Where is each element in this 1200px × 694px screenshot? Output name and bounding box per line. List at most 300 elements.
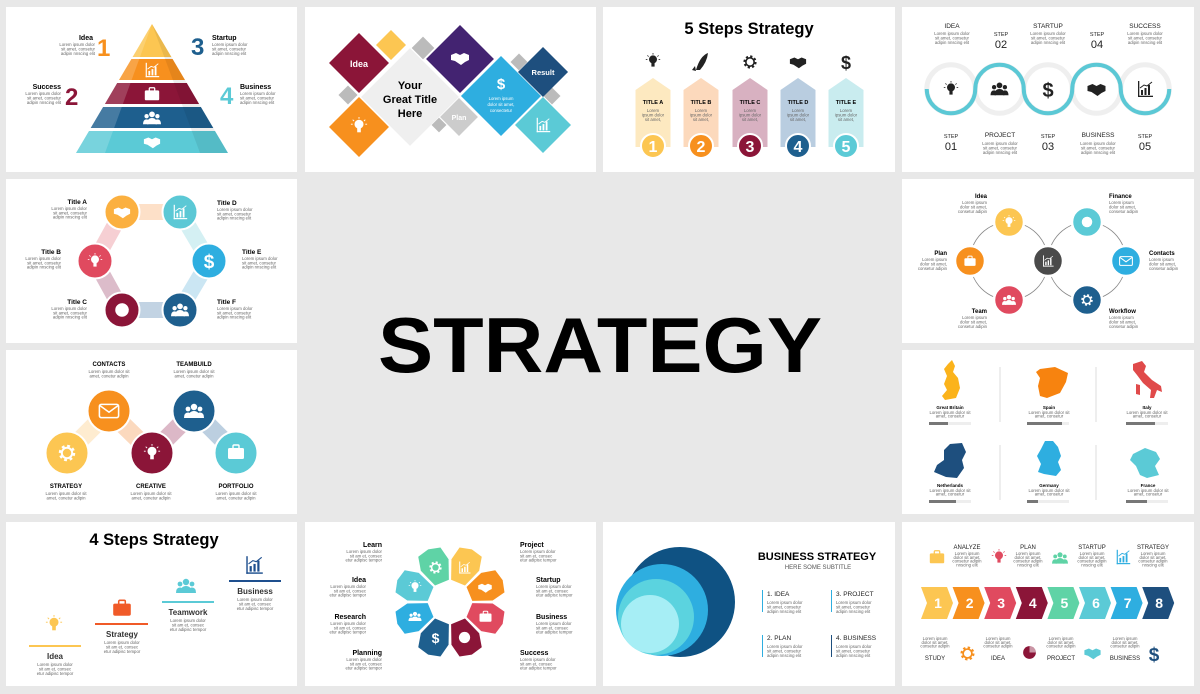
title: STRATEGY: STRATEGY <box>378 301 822 389</box>
step C <box>732 57 768 158</box>
top icons and labels: nnscing elit <box>1017 562 1040 567</box>
circle labels: Lorem ipsum <box>962 200 987 205</box>
step D: TITLE D <box>788 100 808 106</box>
numbered arrows: 2 <box>966 595 974 611</box>
top labels: 02 <box>995 39 1007 51</box>
petal labels: sit am et, consec <box>536 588 569 593</box>
step B: TITLE B <box>691 100 711 106</box>
step D: Lorem <box>792 108 805 113</box>
label: Startup 3: sit amet, consetur <box>212 46 246 52</box>
top labels: 04 <box>1091 39 1103 51</box>
top icons and labels: Lorem ipsum <box>1080 551 1105 556</box>
bottom labels: PROJECT <box>985 132 1015 139</box>
ring labels: Title A <box>67 199 87 206</box>
circle labels: dolor sit amet, <box>920 262 947 266</box>
petal labels: Lorem ipsum dolor <box>520 549 556 554</box>
map: Great Britain: Lorem ipsum dolor sit <box>929 410 971 415</box>
items: adipin nnscing elit <box>836 653 871 658</box>
zigzag icons <box>60 404 244 460</box>
step: Idea: etur adipisc tempor <box>37 671 74 676</box>
diamond: title <box>361 48 459 146</box>
zigzag labels: Lorem ipsum dolor sit <box>88 369 130 374</box>
map: Great Britain: amet, consetur <box>936 414 965 418</box>
bottom icons and labels: Lorem ipsum <box>986 636 1011 641</box>
bottom icons and labels: consetur adipin <box>1046 644 1076 649</box>
circle labels: consetur adipin <box>958 209 988 214</box>
step E: 5 <box>842 139 851 156</box>
top labels: Lorem ipsum dolor <box>1127 31 1163 36</box>
step: Business: Business <box>237 587 273 596</box>
petal labels: Success <box>520 650 549 657</box>
circle labels: Workflow <box>1109 309 1136 315</box>
map: Netherlands <box>929 443 971 503</box>
petal labels: etur adipisc tempor <box>536 593 573 598</box>
step: Strategy: etur adipisc tempor <box>104 649 141 654</box>
top labels: adipin nnscing elit <box>1031 40 1066 45</box>
step E: TITLE E <box>836 100 857 106</box>
bottom icons and labels: $ <box>1149 645 1160 666</box>
step E <box>828 53 864 158</box>
ring labels: adipin nnscing elit <box>217 315 252 320</box>
numbered arrows: 8 <box>1155 595 1163 611</box>
diamond: title: Great Title <box>383 94 437 106</box>
heading <box>758 551 877 571</box>
step: Idea: Idea <box>47 652 64 661</box>
petal labels: Planning <box>352 650 382 657</box>
step: Teamwork: etur adipisc tempor <box>170 627 207 632</box>
petal labels: sit am et, consec <box>334 625 367 630</box>
panel: 8 arrows <box>902 522 1194 686</box>
map: Spain <box>1027 367 1070 425</box>
bottom icons and labels: IDEA <box>991 656 1005 662</box>
top labels: adipin nnscing elit <box>1128 40 1163 45</box>
numbered arrows: 4 <box>1029 595 1037 611</box>
circle labels: Team <box>972 309 987 315</box>
diamond: result <box>518 47 568 97</box>
items: 4. BUSINESS <box>836 635 877 642</box>
top icons and labels: consetur adipin <box>1077 559 1107 564</box>
ring labels: sit amet, consetur <box>217 211 251 216</box>
step D <box>780 58 816 158</box>
label: Success 2: 2 <box>65 84 78 111</box>
ring labels: Title D <box>217 200 237 207</box>
small gray diamonds <box>338 37 560 132</box>
circle labels: dolor sit amet, <box>960 204 987 210</box>
zigzag labels: Lorem ipsum dolor sit <box>45 491 87 496</box>
top icons and labels: dolor sit amet, <box>954 555 980 560</box>
bottom labels: adipin nnscing elit <box>1081 150 1116 155</box>
ring labels: Title F <box>217 299 236 306</box>
step: Strategy: Lorem ipsum dolor <box>104 640 140 645</box>
step A: ipsum dolor <box>642 113 665 118</box>
title: 4 Steps Strategy <box>89 531 219 549</box>
petal labels: sit am et, consec <box>334 588 367 593</box>
wave icons <box>944 80 1153 102</box>
bottom icons and labels: dolor sit amet, <box>984 640 1012 645</box>
diamond: dollar: $ <box>497 76 506 93</box>
bottom labels: Lorem ipsum dolor <box>982 141 1018 146</box>
map: Netherlands: amet, consetur <box>936 492 965 496</box>
ring labels: Lorem ipsum dolor <box>242 256 278 261</box>
map: Great Britain: Great Britain <box>936 405 964 410</box>
petal ring <box>392 544 508 660</box>
step A <box>636 53 670 158</box>
circle labels: Plan <box>934 251 947 257</box>
map: Spain: Spain <box>1043 405 1055 410</box>
top icons and labels: dolor sit amet, <box>1140 555 1166 560</box>
petal labels: Business <box>536 614 567 621</box>
circle labels: dolor sit amet, <box>1149 262 1176 266</box>
top labels: SUCCESS <box>1129 23 1161 30</box>
items: 1. IDEA <box>767 591 790 598</box>
diamond: handshake <box>426 25 494 93</box>
petal labels: Lorem ipsum dolor <box>330 584 367 589</box>
numbered arrows: 7 <box>1124 595 1132 611</box>
step: Strategy: sit am et, consec <box>106 644 139 650</box>
ring circles <box>78 194 226 328</box>
zigzag labels: STRATEGY <box>50 484 82 490</box>
items: Lorem ipsum dolor <box>767 644 803 649</box>
ring labels: Lorem ipsum dolor <box>51 206 88 211</box>
top labels: IDEA <box>944 23 960 30</box>
zigzag labels <box>45 362 257 501</box>
circle labels: Contacts <box>1149 251 1175 257</box>
ring labels: Title E <box>242 249 262 256</box>
step B: ipsum dolor <box>690 113 713 118</box>
top labels: Lorem ipsum dolor <box>1030 31 1066 36</box>
petal labels: Research <box>334 614 366 621</box>
heading: BUSINESS STRATEGY <box>758 551 877 563</box>
step B: sit amet, <box>693 117 709 122</box>
petal labels: etur adipisc tempor <box>345 558 383 563</box>
diamond: dollar <box>461 56 541 136</box>
bottom icons and labels: STUDY <box>925 656 945 662</box>
numbered arrows: 3 <box>997 595 1005 611</box>
petal labels: Lorem ipsum dolor <box>520 657 556 662</box>
diamond: dollar: consectetur <box>490 108 513 113</box>
bottom icons and labels: dolor sit amet, <box>1048 640 1074 645</box>
petal labels: Idea <box>352 577 366 584</box>
label: Success 2: sit amet, consetur <box>27 96 62 100</box>
petal labels: sit am et, consec <box>536 625 569 630</box>
petal labels: Lorem ipsum dolor <box>536 584 572 589</box>
petal labels: etur adipisc tempor <box>520 558 557 563</box>
bottom labels: sit amet, consetur <box>983 146 1018 151</box>
petal labels: Lorem ipsum dolor <box>330 621 367 626</box>
zigzag labels: TEAMBUILD <box>176 362 212 368</box>
top icons and labels: nnscing elit <box>956 562 979 567</box>
ring icons: $ <box>204 252 215 273</box>
ring labels <box>25 199 278 320</box>
bottom icons and labels: consetur adipin <box>1110 644 1140 649</box>
ring labels: adipin nnscing elit <box>27 265 62 270</box>
circles <box>955 207 1141 315</box>
label: Business 4 <box>220 83 276 110</box>
label: Idea 1: adipin nnscing elit <box>61 51 96 56</box>
step A: 1 <box>649 139 658 156</box>
ring labels: adipin nnscing elit <box>217 216 252 221</box>
petal labels: Project <box>520 542 544 549</box>
items: Lorem ipsum dolor <box>836 644 872 649</box>
petal labels: Lorem ipsum dolor <box>346 657 383 662</box>
bottom labels: sit amet, consetur <box>1081 146 1116 151</box>
panel: pyramid <box>6 7 297 172</box>
ring labels: Lorem ipsum dolor <box>217 306 253 311</box>
top icons and labels: STRATEGY <box>1137 545 1169 551</box>
bottom icons and labels: Lorem ipsum <box>923 636 948 641</box>
top labels: sit amet, consetur <box>1031 36 1066 41</box>
step A: TITLE A <box>643 100 663 106</box>
top icons and labels: Lorem ipsum <box>955 551 980 556</box>
panel: 4 steps strategy <box>6 522 297 686</box>
map: Italy <box>1126 361 1168 425</box>
label: Startup 3: Startup <box>212 35 236 42</box>
title: 5 Steps Strategy <box>684 20 814 38</box>
label: Idea 1: sit amet, consetur <box>61 46 96 52</box>
label: Idea 1: 1 <box>97 35 110 62</box>
top labels: Lorem ipsum dolor <box>934 31 970 36</box>
ring labels: sit amet, consetur <box>53 310 88 315</box>
petal labels: etur adipisc tempor <box>536 630 573 635</box>
numbered arrows: 5 <box>1061 595 1069 611</box>
step B: 2 <box>697 139 706 156</box>
panel: zigzag circles <box>6 350 297 514</box>
map: Germany: Lorem ipsum dolor sit <box>1028 488 1070 493</box>
map: Spain: Lorem ipsum dolor sit <box>1028 410 1070 415</box>
top labels: sit amet, consetur <box>1128 36 1163 41</box>
label: Success 2: Success <box>33 84 61 91</box>
step: Strategy <box>95 600 148 654</box>
bottom icons and labels: dolor sit amet, <box>1112 640 1138 645</box>
diamond: dollar: dolor sit amet, <box>488 102 514 107</box>
map: Netherlands: Lorem ipsum dolor sit <box>929 488 971 493</box>
map: France: Lorem ipsum dolor sit <box>1127 488 1169 493</box>
circle labels: Finance <box>1109 194 1132 200</box>
top icons and labels: consetur adipin <box>952 559 982 564</box>
bottom icons and labels: PROJECT <box>1047 656 1075 662</box>
diamond: chart <box>515 97 571 153</box>
step C: TITLE C <box>740 100 760 106</box>
circle labels: consetur adipin <box>918 266 948 271</box>
label: Startup 3: Lorem ipsum dolor <box>212 42 248 47</box>
ring labels: sit amet, consetur <box>217 310 251 315</box>
step E: sit amet, <box>838 117 854 122</box>
map: Germany <box>1027 441 1070 503</box>
wave line <box>927 65 1169 113</box>
zigzag labels: amet, conetur adipin <box>90 374 129 379</box>
label: Success 2 <box>25 84 78 111</box>
bottom icons and labels: dolor sit amet, <box>922 640 948 645</box>
map: Italy: amet, consetur <box>1133 414 1162 418</box>
circle labels: dolor sit amet, <box>1109 204 1136 210</box>
step: Teamwork: sit am et, consec <box>172 622 205 628</box>
label: Startup 3: adipin nnscing elit <box>212 51 247 56</box>
step C: 3 <box>746 139 755 156</box>
top labels: STEP <box>1090 32 1105 38</box>
step: Strategy: Strategy <box>106 630 139 639</box>
bottom labels <box>944 132 1153 155</box>
zigzag labels: amet, conetur adipin <box>175 374 214 379</box>
circle labels: consetur adipin <box>1149 266 1179 271</box>
bottom labels: adipin nnscing elit <box>983 150 1018 155</box>
bottom labels: STEP <box>1138 134 1153 140</box>
circle labels: Lorem ipsum <box>1149 257 1174 262</box>
circle labels: consetur adipin <box>958 324 988 329</box>
map: Germany: amet, consetur <box>1035 492 1064 496</box>
map: Spain: amet, consetur <box>1035 414 1064 418</box>
bottom labels: Lorem ipsum dolor <box>1080 141 1116 146</box>
zigzag labels: Lorem ipsum dolor sit <box>173 369 215 374</box>
bottom icons and labels: consetur adipin <box>920 644 950 649</box>
map: Germany: Germany <box>1039 483 1059 488</box>
petal labels: etur adipisc tempor <box>345 666 383 671</box>
diamond: dollar: Lorem ipsum <box>489 96 514 101</box>
petal labels: etur adipisc tempor <box>329 630 367 635</box>
petal labels: sit am et, consec <box>520 553 553 558</box>
step E: ipsum dolor <box>835 113 858 118</box>
zigzag labels: CONTACTS <box>93 362 125 368</box>
top icons and labels: Lorem ipsum <box>1141 551 1166 556</box>
numbered arrows <box>921 587 1174 619</box>
ring labels: Title C <box>67 299 87 306</box>
pyramid chart <box>76 24 228 153</box>
top labels: sit amet, consetur <box>935 36 970 41</box>
zigzag labels: amet, conetur adipin <box>47 496 86 501</box>
panel: hexagon ring <box>6 179 297 343</box>
items: Lorem ipsum dolor <box>836 600 872 605</box>
bottom icons and labels <box>920 636 1160 666</box>
panel: gear petals <box>305 522 596 686</box>
step: Idea: sit am et, consec <box>39 666 72 672</box>
numbered arrows: 6 <box>1092 595 1100 611</box>
step D: 4 <box>794 139 803 156</box>
label: Success 2: Lorem ipsum dolor <box>25 91 62 96</box>
concentric circles <box>616 547 735 657</box>
ring labels: sit amet, consetur <box>27 260 62 265</box>
zigzag labels: Lorem ipsum dolor sit <box>130 491 172 496</box>
connecting arcs <box>970 222 1126 300</box>
numbered arrows: 1 <box>934 595 942 611</box>
items: sit amet, consetur <box>836 604 870 610</box>
top labels: STEP <box>994 32 1009 38</box>
bottom icons and labels: consetur adipin <box>983 644 1013 649</box>
map: Netherlands: Netherlands <box>937 483 963 488</box>
diamond: plan: Plan <box>452 115 466 122</box>
items: sit amet, consetur <box>767 604 801 610</box>
zigzag labels: amet, conetur adipin <box>217 496 256 501</box>
step C: Lorem <box>744 108 757 113</box>
wave rings <box>927 65 1169 113</box>
bottom icons and labels: Lorem ipsum <box>1113 636 1138 641</box>
label: Business 4: 4 <box>220 83 234 110</box>
step D: sit amet, <box>790 117 806 122</box>
map: Italy: Italy <box>1142 405 1152 410</box>
step C: ipsum dolor <box>739 113 762 118</box>
step: Business: etur adipisc tempor <box>237 606 274 611</box>
step E: $ <box>841 53 851 73</box>
circle labels: dolor sit amet, <box>1109 320 1136 324</box>
map: France <box>1126 448 1169 503</box>
diamond: idea: Idea <box>350 59 369 69</box>
step: Teamwork <box>162 579 214 632</box>
label: Business 4: adipin nnscing elit <box>240 100 275 105</box>
step A: Lorem <box>647 108 660 113</box>
ring labels: Title B <box>41 249 61 256</box>
top icons and labels: dolor sit amet, <box>1078 555 1106 560</box>
bottom labels: BUSINESS <box>1082 132 1115 139</box>
label: Idea 1: Idea <box>79 35 93 42</box>
top labels <box>934 23 1163 51</box>
petal labels: sit am et, consec <box>520 661 553 666</box>
items: adipin nnscing elit <box>836 609 871 614</box>
ring icons <box>88 205 215 317</box>
zigzag connectors <box>67 411 236 453</box>
petal labels: Startup <box>536 577 560 584</box>
top labels: adipin nnscing elit <box>935 40 970 45</box>
ring labels: adipin nnscing elit <box>53 315 88 320</box>
circle labels: consetur adipin <box>1109 209 1139 214</box>
panel: infinity circles <box>902 179 1194 343</box>
step E: Lorem <box>840 108 853 113</box>
top labels: STARTUP <box>1033 23 1063 30</box>
zigzag circles <box>46 390 258 474</box>
zigzag labels: amet, conetur adipin <box>132 496 171 501</box>
diamond: yellow <box>376 30 406 60</box>
step: Business <box>229 556 281 611</box>
diamond: title: Your <box>398 80 423 92</box>
circle labels: Lorem ipsum <box>962 315 987 320</box>
bottom labels: STEP <box>1041 134 1056 140</box>
step: Teamwork: Teamwork <box>169 608 208 617</box>
zigzag labels: Lorem ipsum dolor sit <box>215 491 257 496</box>
petal labels: sit am et, consec <box>350 661 383 666</box>
items: sit amet, consetur <box>767 648 801 654</box>
step: Teamwork: Lorem ipsum dolor <box>170 618 206 623</box>
step: Business: sit am et, consec <box>239 602 272 606</box>
top icons and labels: PLAN <box>1020 545 1036 551</box>
petal labels: sit am et, consec <box>350 553 383 558</box>
top icons and labels: nnscing elit <box>1081 562 1104 567</box>
panel: country maps <box>902 350 1194 514</box>
ring labels: Lorem ipsum dolor <box>25 256 62 261</box>
wave icons: $ <box>1042 80 1054 102</box>
map: France: France <box>1141 483 1156 488</box>
heading: HERE SOME SUBTITLE <box>785 565 851 571</box>
items: adipin nnscing elit <box>767 653 802 658</box>
top icons and labels: ANALYZE <box>954 545 980 551</box>
diamond: idea <box>329 33 389 93</box>
circle labels: Lorem ipsum <box>1109 315 1134 320</box>
items: 3. PROJECT <box>836 591 874 598</box>
circle labels: consetur adipin <box>1109 324 1139 329</box>
items: 2. PLAN <box>767 635 792 642</box>
circle labels: Lorem ipsum <box>922 257 947 262</box>
zigzag labels: CREATIVE <box>136 484 166 490</box>
step: Idea <box>29 615 81 676</box>
items: sit amet, consetur <box>836 648 870 654</box>
top icons and labels: Lorem ipsum <box>1016 551 1041 556</box>
ring labels: adipin nnscing elit <box>53 215 88 220</box>
bottom icons and labels: Lorem ipsum <box>1049 636 1074 641</box>
diamond: plan <box>440 98 478 136</box>
step B <box>684 53 718 158</box>
panel: wave steps <box>902 7 1194 172</box>
diamond: bulb <box>329 97 389 157</box>
panel: diamonds <box>305 7 596 172</box>
top icons and labels <box>930 545 1169 567</box>
petal labels: Learn <box>363 542 382 549</box>
ring labels: Lorem ipsum dolor <box>51 306 88 311</box>
